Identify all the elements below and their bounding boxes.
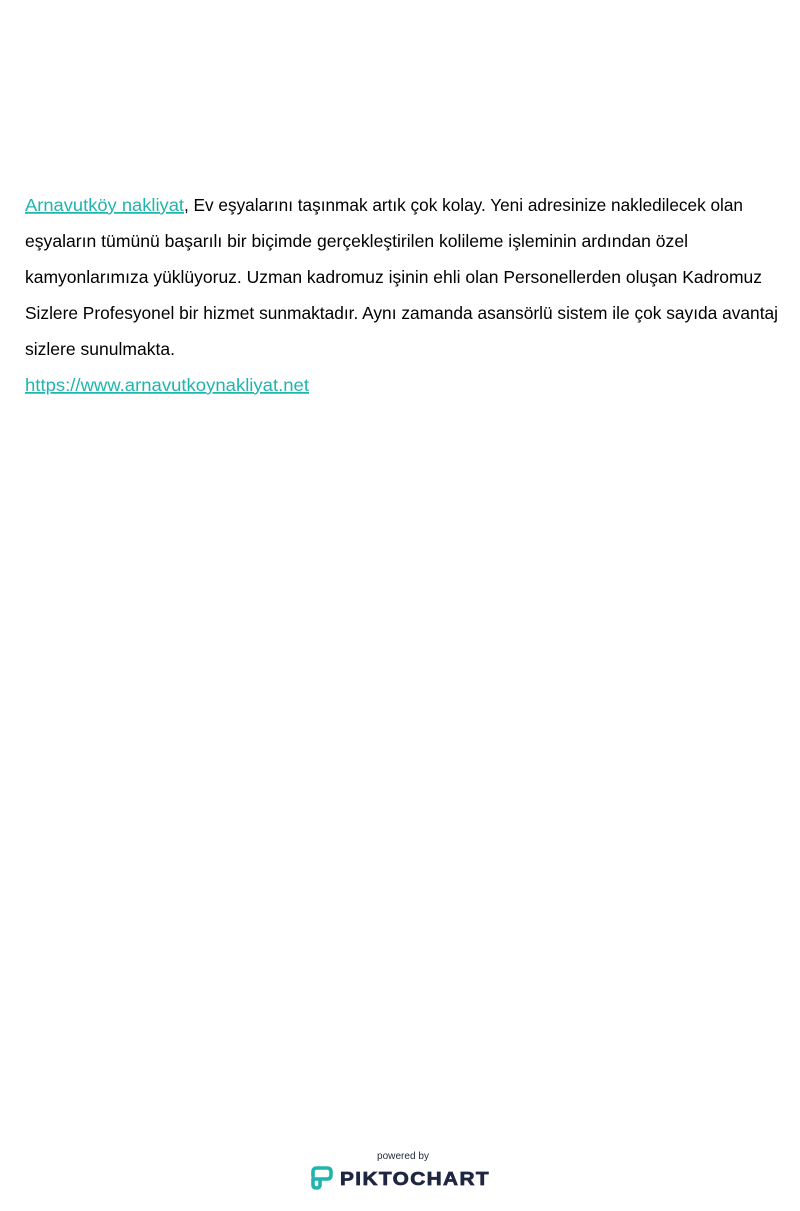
text block: description paragraph xyxy=(25,195,778,359)
text block: description paragraph: , Ev eşyalarını taşınmak artık çok kolay. Yeni adresinize nakledilecek olan xyxy=(184,195,743,215)
link: website URL: https://www.arnavutkoynakliyat.net xyxy=(25,375,309,395)
link: Arnavutköy nakliyat: Arnavutköy nakliyat xyxy=(25,195,184,215)
text block: description paragraph: sizlere sunulmakta. xyxy=(25,339,175,359)
icon: Piktochart logo mark xyxy=(313,1168,331,1188)
wordmark: PIKTOCHART: PIKTOCHART xyxy=(340,1169,490,1189)
text block: description paragraph: Sizlere Profesyonel bir hizmet sunmaktadır. Aynı zamanda asansörlü sistem ile çok sayıda avantaj xyxy=(25,303,778,323)
footer: powered by Piktochart xyxy=(313,1151,490,1189)
text block: description paragraph: eşyaların tümünü başarılı bir biçimde gerçekleştirilen kolileme işleminin ardından özel xyxy=(25,231,688,251)
text block: description paragraph: kamyonlarımıza yüklüyoruz. Uzman kadromuz işinin ehli olan Personellerden oluşan Kadromuz xyxy=(25,267,762,287)
powered by label: powered by xyxy=(377,1151,429,1162)
